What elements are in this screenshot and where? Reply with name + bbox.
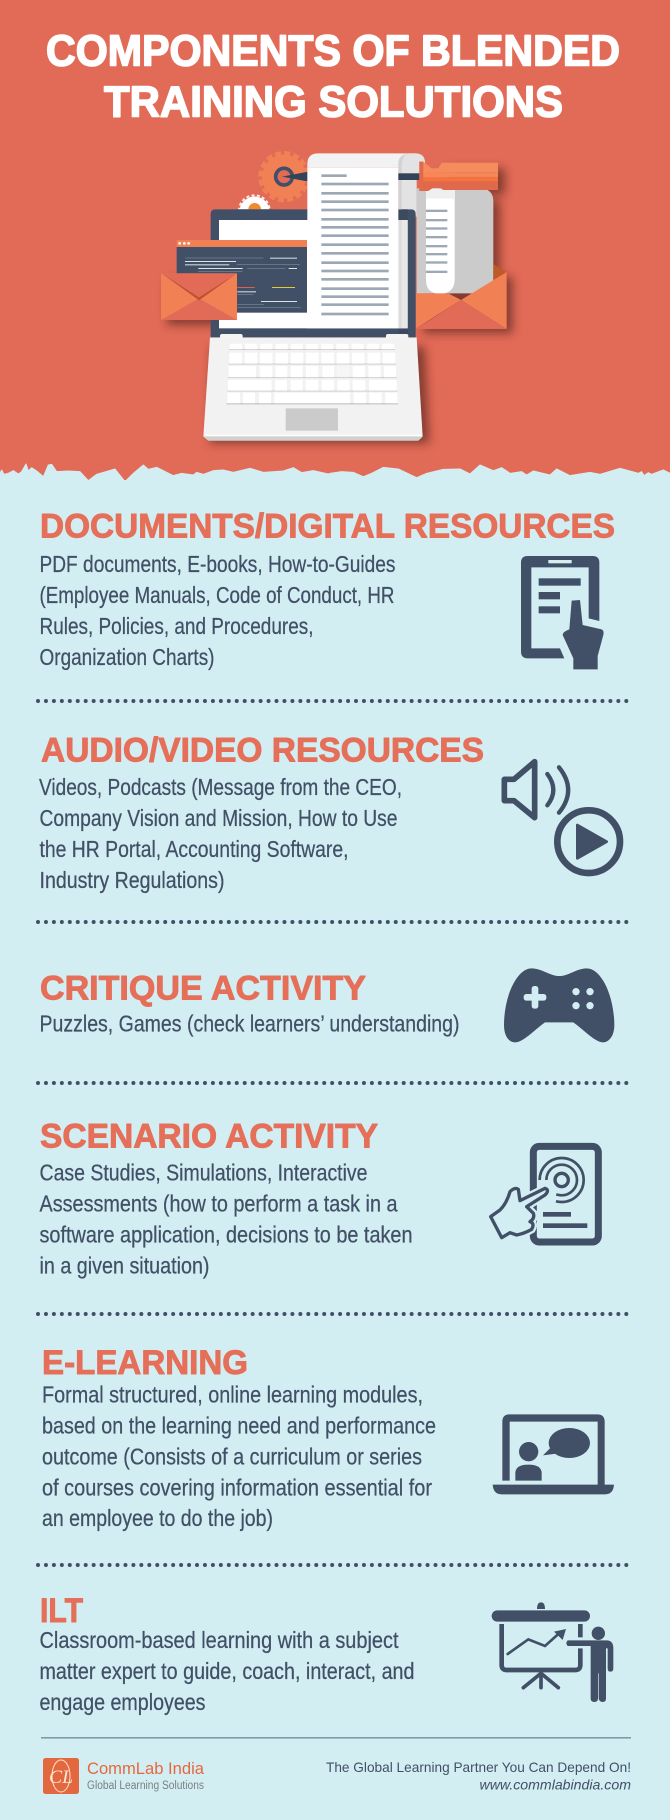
illustration: laptop with documents, envelopes and gears — [161, 153, 513, 443]
background: coral header — [0, 0, 670, 480]
laptop screen — [211, 173, 417, 339]
tagline and website: www.commlabindia.com — [480, 1776, 631, 1792]
background: torn paper edge and light body — [0, 464, 670, 1778]
panel: e-learning — [42, 1344, 614, 1531]
text block: audio/video description: Videos, Podcasts (Message from the CEO, — [39, 774, 402, 800]
logo: CommLab India — [43, 1758, 205, 1794]
text block: scenario description — [40, 1160, 412, 1278]
icon: tablet with touch rings and hand — [491, 1146, 598, 1242]
text block: documents description: PDF documents, E-books, How-to-Guides — [40, 551, 396, 577]
logo: CommLab India: Global Learning Solutions — [87, 1780, 204, 1792]
heading: documents/digital resources: DOCUMENTS/DIGITAL RESOURCES — [40, 508, 615, 546]
text block: e-learning description: based on the learning need and performance — [42, 1412, 436, 1438]
icon: game controller — [504, 968, 614, 1042]
text block: audio/video description: the HR Portal, Accounting Software, — [40, 836, 348, 862]
front scroll document — [307, 153, 425, 328]
tagline and website: The Global Learning Partner You Can Depend On! — [326, 1759, 631, 1775]
text block: audio/video description — [39, 774, 402, 893]
text block: ILT description: engage employees — [40, 1689, 206, 1715]
left envelope — [161, 273, 237, 320]
panel: ILT — [40, 1592, 613, 1715]
panel: scenario activity — [40, 1118, 598, 1278]
text block: e-learning description: Formal structured, online learning modules, — [42, 1382, 423, 1408]
text block: ILT description: Classroom-based learning with a subject — [40, 1627, 399, 1653]
title: TRAINING SOLUTIONS — [104, 78, 563, 126]
text block: scenario description: software application, decisions to be taken — [40, 1222, 412, 1248]
panel: documents/digital resources — [40, 508, 615, 670]
logo: CommLab India: CommLab India — [87, 1759, 205, 1778]
title — [46, 26, 620, 126]
icon: presenter with chart board — [492, 1602, 613, 1702]
text block: scenario description: Assessments (how to perform a task in a — [40, 1190, 398, 1216]
heading: critique activity: CRITIQUE ACTIVITY — [40, 970, 366, 1008]
heading: ILT: ILT — [40, 1592, 83, 1630]
panel: critique activity — [40, 968, 614, 1042]
tagline and website — [326, 1759, 631, 1792]
text block: scenario description: in a given situation) — [40, 1252, 210, 1278]
heading: e-learning: E-LEARNING — [42, 1344, 248, 1382]
text block: documents description: Rules, Policies, and Procedures, — [40, 613, 314, 639]
footer — [41, 1737, 631, 1794]
text block: e-learning description — [42, 1382, 436, 1531]
logo: CommLab India: CL — [49, 1767, 73, 1788]
orange ribbon roll — [419, 162, 498, 191]
panel: audio/video resources — [39, 732, 620, 893]
icon: orange gear — [260, 153, 308, 200]
title: COMPONENTS OF BLENDED — [46, 26, 620, 76]
text block: ILT description — [40, 1627, 414, 1715]
text block: documents description: (Employee Manuals, Code of Conduct, HR — [40, 582, 394, 608]
text block: e-learning description: of courses covering information essential for — [42, 1474, 432, 1500]
text block: e-learning description: an employee to do the job) — [42, 1505, 273, 1531]
icon: white gear — [237, 195, 273, 226]
right envelope — [416, 264, 507, 329]
icon: speaker and play button — [504, 762, 620, 873]
text block: audio/video description: Company Vision and Mission, How to Use — [40, 805, 398, 831]
icon: tablet with pointing hand — [521, 556, 604, 669]
text block: audio/video description: Industry Regulations) — [40, 867, 224, 893]
text block: ILT description: matter expert to guide, coach, interact, and — [40, 1658, 414, 1684]
laptop base — [203, 337, 423, 441]
text block: critique description: Puzzles, Games (check learners’ understanding) — [40, 1010, 460, 1036]
text block: e-learning description: outcome (Consists of a curriculum or series — [42, 1444, 422, 1470]
shadows — [167, 168, 513, 443]
text block: documents description: Organization Charts) — [40, 644, 214, 670]
heading: scenario activity: SCENARIO ACTIVITY — [40, 1118, 378, 1156]
text block: scenario description: Case Studies, Simulations, Interactive — [40, 1160, 368, 1186]
back scroll document — [417, 188, 493, 294]
text block: documents description — [40, 551, 396, 670]
heading: audio/video resources: AUDIO/VIDEO RESOURCES — [41, 732, 484, 770]
code window — [177, 240, 307, 313]
icon: laptop with speaker and speech bubble — [493, 1414, 614, 1494]
